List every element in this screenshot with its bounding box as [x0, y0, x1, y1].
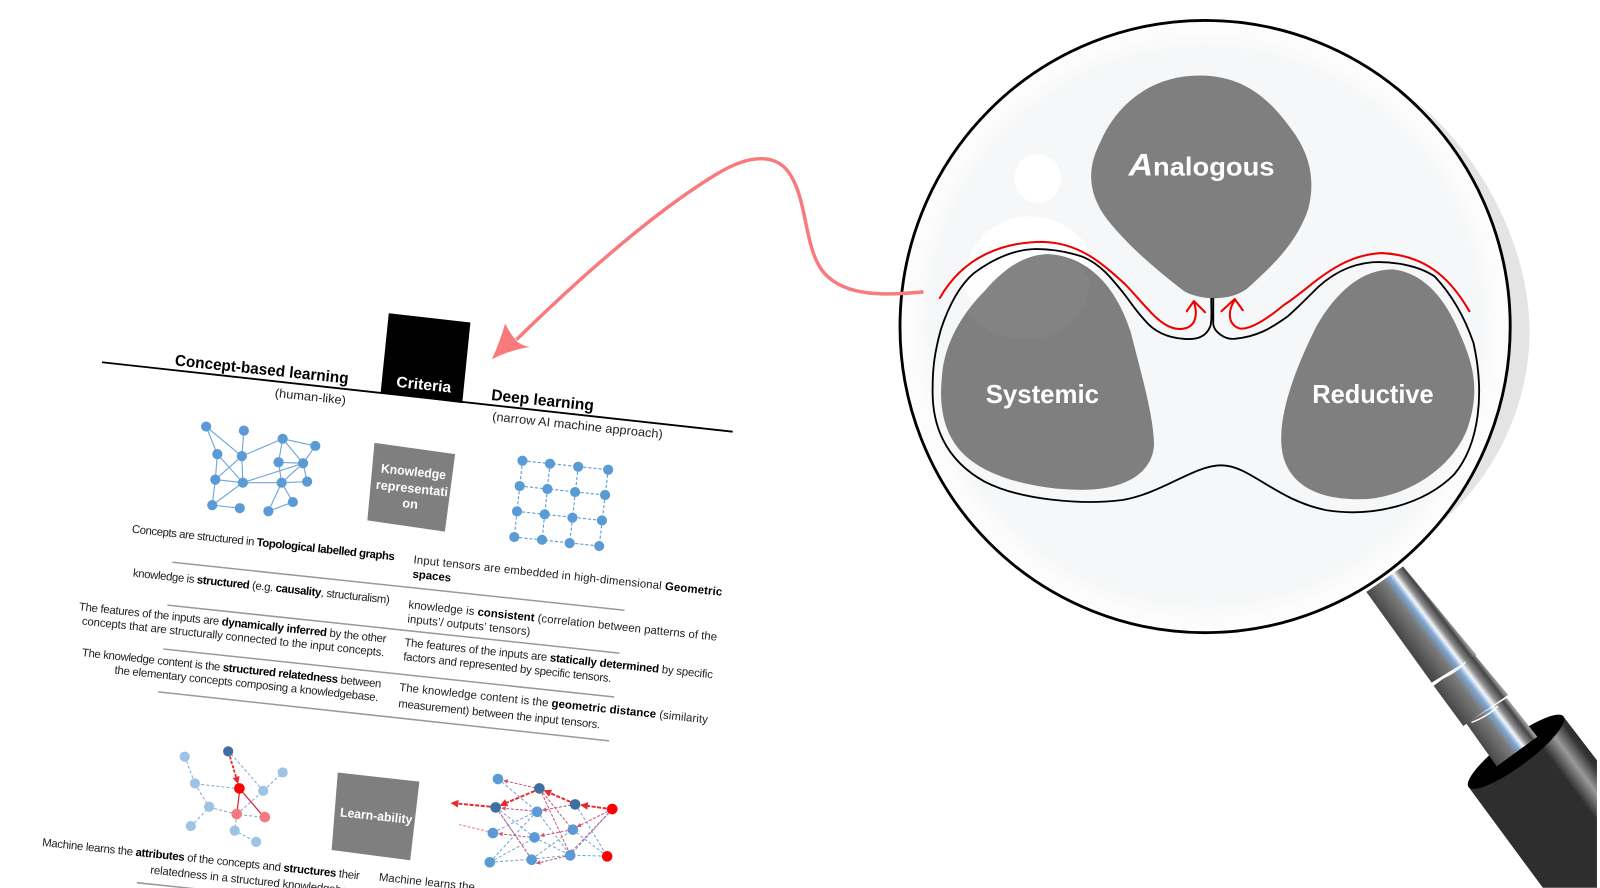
- text block: concept-based knowledge representation: Concepts are structured in Topological labelled graphs: [131, 524, 395, 563]
- box: knowledge representation: representati: [375, 477, 449, 499]
- criteria header box: Criteria: [396, 374, 453, 397]
- heading: concept-based learning: Concept-based learning: [174, 352, 349, 388]
- icon: magnifying glass lens shadow: [1414, 100, 1530, 520]
- header rule: [102, 362, 733, 432]
- icon: lens highlight dot: [1014, 154, 1061, 203]
- criteria header box: [381, 313, 470, 403]
- box: knowledge representation: Knowledge: [380, 461, 447, 482]
- box: learn-ability: [332, 772, 419, 860]
- text block: deep learning knowledge representation: measurement) between the input tensors.: [398, 698, 601, 731]
- heading: deep learning: [490, 387, 663, 441]
- text block: deep learning knowledge representation: inputs’/ outputs’ tensors): [407, 614, 531, 638]
- blob: reductive: Reductive: [1312, 381, 1434, 409]
- text block: deep learning knowledge representation: spaces: [412, 569, 452, 585]
- box: knowledge representation: on: [402, 495, 419, 512]
- chart: geometric grid of tensors: [509, 456, 613, 551]
- blob: reductive: [1281, 269, 1474, 499]
- text block: learn-ability descriptions: Machine learns the attributes of the concepts and structures their: [42, 837, 361, 882]
- red arrow: left flow: [940, 242, 1205, 329]
- text block: concept-based knowledge representation: concepts that are structurally connected to the input concepts.: [81, 616, 385, 659]
- box: knowledge representation: [367, 443, 455, 532]
- text block: concept-based knowledge representation: knowledge is structured (e.g. causality, structuralism): [132, 568, 391, 607]
- text block: deep learning knowledge representation: knowledge is consistent (correlation between patterns of the: [408, 599, 718, 644]
- text block: learn-ability descriptions: [42, 837, 475, 888]
- blob: analogous: [1091, 76, 1311, 298]
- panel: comparison table document: [42, 313, 733, 888]
- box: learn-ability: Learn-ability: [339, 804, 414, 827]
- text block: concept-based knowledge representation: [78, 524, 395, 704]
- heading: concept-based learning: [174, 352, 349, 407]
- text block: deep learning knowledge representation: The features of the inputs are statically determined by specific: [404, 637, 714, 681]
- pink arrow from lens to document: [492, 159, 923, 359]
- text block: deep learning knowledge representation: Input tensors are embedded in high-dimensional Geometric: [413, 554, 723, 599]
- red arrow: right flow: [1221, 253, 1469, 329]
- blob: systemic: Systemic: [986, 381, 1099, 409]
- text block: deep learning knowledge representation: The knowledge content is the geometric distance (similarity: [399, 682, 709, 726]
- chart: topological labelled graph: [201, 421, 320, 516]
- heading: concept-based learning: (human-like): [274, 386, 347, 407]
- text block: deep learning knowledge representation: factors and represented by specific tensors.: [403, 651, 612, 685]
- text block: concept-based knowledge representation: the elementary concepts composing a knowledgebase.: [114, 665, 379, 704]
- black contour around the blobs: [933, 249, 1479, 512]
- chart: concept graph learning: [180, 746, 288, 847]
- icon: magnifying glass handle: [1366, 566, 1597, 888]
- heading: deep learning: Deep learning: [490, 387, 595, 415]
- chart: deep network learning: [452, 774, 618, 868]
- blob: analogous: Analogous: [1127, 147, 1274, 183]
- blob: systemic: [941, 254, 1154, 490]
- text block: concept-based knowledge representation: The knowledge content is the structured relatedness between: [81, 647, 382, 691]
- icon: magnifying glass lens: [900, 20, 1510, 633]
- icon: lens highlight blob: [965, 216, 1096, 339]
- text block: concept-based knowledge representation: The features of the inputs are dynamically inferred by the other: [78, 601, 387, 646]
- heading: deep learning: (narrow AI machine approach): [492, 409, 663, 441]
- text block: deep learning knowledge representation: [398, 554, 723, 731]
